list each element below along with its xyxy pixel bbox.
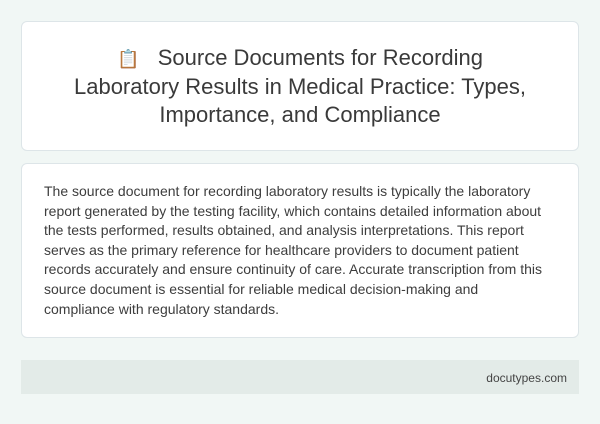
title card: [21, 21, 579, 151]
description text: The source document for recording laboratory results is typically the laboratory report generated by the testing facility, which contains detailed information about the tests performed, results obtained, and analysis interpretations. This report serves as the primary reference for healthcare providers to document patient records accurately and ensure continuity of care. Accurate transcription from this source document is essential for reliable medical decision-making and compliance with regulatory standards.: [44, 183, 542, 317]
title: 📋 Source Documents for Recording Laboratory Results in Medical Practice: Types, Importance, and Compliance: [74, 45, 526, 127]
description panel: [21, 163, 579, 338]
footer: docutypes.com: [486, 371, 567, 385]
footer: [21, 360, 579, 394]
